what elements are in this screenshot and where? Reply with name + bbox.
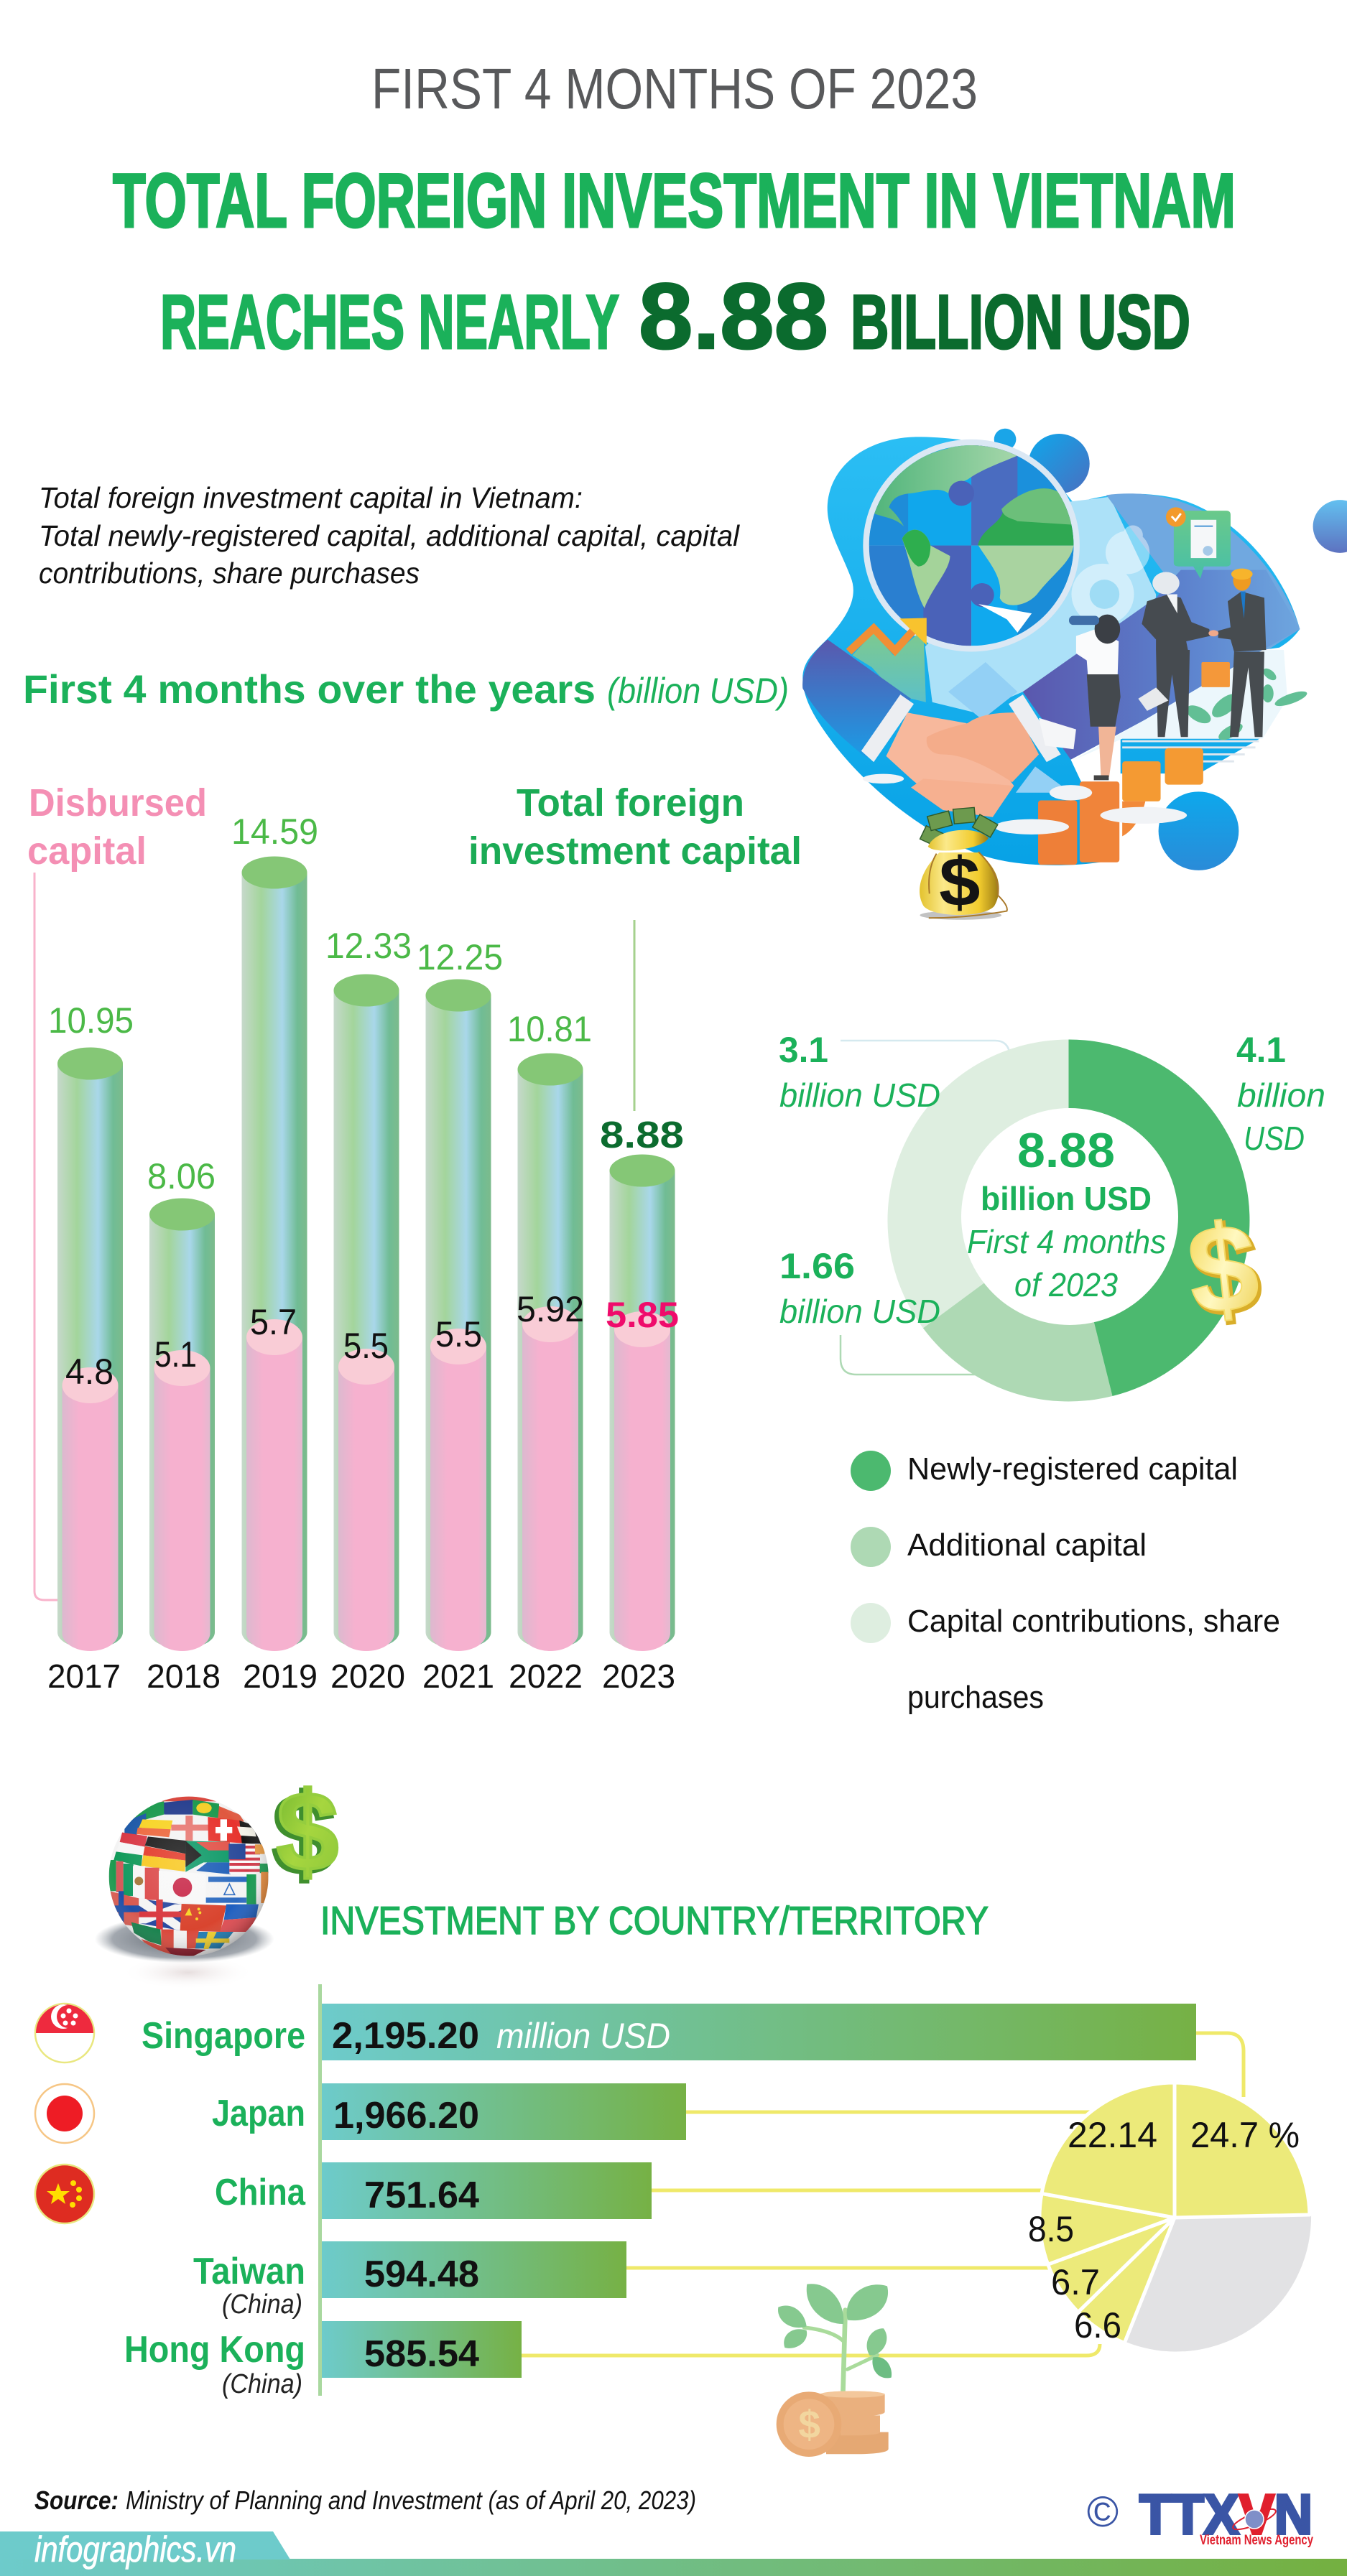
pie labels: 8.5 <box>1028 2209 1074 2249</box>
series label: total foreign investment capital: investment capital <box>468 829 802 873</box>
disbursed capital values: 5.5 <box>435 1314 482 1354</box>
label: 4.1 billion USD: 4.1 <box>1236 1030 1286 1070</box>
flag: Japan <box>35 2084 94 2143</box>
disbursed capital values: 4.8 <box>65 1352 114 1392</box>
year labels: 2021 <box>422 1657 494 1695</box>
country labels: Japan <box>212 2093 305 2134</box>
cylinder chart: total foreign investment vs disbursed capital <box>27 781 802 1695</box>
bar: Hong Kong: 585.54 <box>364 2333 479 2375</box>
flag: Singapore <box>35 2004 94 2063</box>
pie labels <box>1028 2115 1300 2345</box>
icon: gold dollar: $ <box>1182 1197 1264 1341</box>
year labels: 2023 <box>602 1657 675 1695</box>
donut centre text <box>967 1123 1166 1303</box>
plant leaves <box>1183 666 1309 743</box>
donut legend <box>851 1451 1280 1715</box>
section heading: investment by country: INVESTMENT BY COUNTRY/TERRITORY <box>320 1898 989 1943</box>
donut legend: Additional capital <box>907 1528 1147 1563</box>
donut legend: Capital contributions, share <box>907 1604 1280 1639</box>
bar: Singapore <box>322 2004 1196 2060</box>
bar chart: investment by country <box>124 1984 1196 2399</box>
year labels: 2020 <box>330 1657 405 1695</box>
businesswoman with binoculars <box>1069 615 1121 780</box>
donut centre text: billion USD <box>981 1180 1152 1217</box>
disbursed capital values: 5.5 <box>343 1326 389 1366</box>
country labels: (China) <box>222 2369 302 2399</box>
intro definition text <box>39 481 741 590</box>
source note: Ministry of Planning and Investment (as of April 20, 2023) <box>126 2486 696 2515</box>
donut legend: purchases <box>907 1680 1044 1715</box>
series label: disbursed capital: Disbursed <box>29 781 207 824</box>
total capital values: 12.33 <box>325 926 412 966</box>
bar: Japan <box>322 2083 686 2140</box>
intro definition text: Total newly-registered capital, additional capital, capital <box>39 519 741 552</box>
label: 4.1 billion USD: USD <box>1244 1120 1305 1157</box>
label: 4.1 billion USD: billion <box>1237 1077 1325 1114</box>
title: unit: BILLION USD <box>851 279 1190 365</box>
year labels: 2022 <box>509 1657 583 1695</box>
series label: disbursed capital <box>27 781 207 873</box>
leader line: disbursed capital <box>34 873 75 1600</box>
growth arrow chart <box>849 618 927 702</box>
pie labels: 6.7 <box>1051 2262 1100 2302</box>
businessmen shaking hands with briefcase <box>1138 569 1266 737</box>
orange bar steps <box>1038 741 1259 865</box>
connector lines from bars to pie <box>522 2033 1244 2356</box>
donut legend: Newly-registered capital <box>907 1451 1238 1487</box>
intro definition text: Total foreign investment capital in Vietnam: <box>39 481 583 514</box>
icon: gold dollar: $ <box>1184 1199 1267 1344</box>
pink cylinders <box>62 1306 670 1651</box>
country labels: Taiwan <box>193 2251 305 2292</box>
country labels <box>124 2015 306 2399</box>
TTXVN logo: Vietnam News Agency <box>1200 2533 1313 2548</box>
disbursed capital values: 5.92 <box>517 1289 584 1329</box>
handshake <box>802 640 1076 817</box>
series label: total foreign investment capital <box>468 781 802 873</box>
label: 1.66 billion USD: billion USD <box>779 1293 940 1330</box>
year labels: 2019 <box>243 1657 318 1695</box>
bar: Singapore: 2,195.20 <box>332 2015 479 2057</box>
series label: total foreign investment capital: Total foreign <box>517 781 744 824</box>
clouds <box>863 774 1092 834</box>
title: headline number: 8.88 <box>639 264 828 368</box>
axis <box>318 1984 322 2396</box>
label: 1.66 billion USD <box>779 1246 940 1330</box>
TTXVN logo: TTXVN <box>1139 2483 1313 2546</box>
series label: disbursed capital: capital <box>27 829 147 873</box>
intro definition text: contributions, share purchases <box>39 557 420 590</box>
label: 3.1 billion USD: billion USD <box>779 1077 940 1114</box>
chart heading: (billion USD) <box>607 671 789 711</box>
bar: Taiwan: 594.48 <box>364 2254 479 2295</box>
country labels: Hong Kong <box>124 2329 305 2371</box>
label: 3.1 billion USD: 3.1 <box>779 1030 828 1070</box>
total capital values: 10.95 <box>48 1000 134 1041</box>
footer band <box>0 2529 1347 2576</box>
year labels: 2017 <box>47 1657 121 1695</box>
total capital values: 14.59 <box>231 812 318 852</box>
bar: China <box>322 2162 652 2219</box>
donut centre text: of 2023 <box>1014 1266 1118 1303</box>
chart heading: First 4 months over the years <box>23 666 596 712</box>
title: main line 2: REACHES NEARLY <box>160 279 619 365</box>
pie: top five country shares <box>1040 2083 1310 2343</box>
segment: additional capital <box>923 1221 1112 1402</box>
donut chart: capital composition <box>779 1030 1325 1402</box>
disbursed capital values: 5.7 <box>250 1302 297 1342</box>
footer band: infographics.vn <box>34 2529 236 2570</box>
donut leader lines <box>841 1041 1010 1375</box>
pie labels: 6.6 <box>1074 2305 1121 2345</box>
country labels: China <box>215 2172 306 2213</box>
bar: Japan: 1,966.20 <box>333 2095 479 2136</box>
icon: sprout on coins <box>777 2284 892 2457</box>
TTXVN logo: © <box>1087 2488 1119 2536</box>
label: 4.1 billion USD <box>1236 1030 1325 1157</box>
green cylinders <box>57 856 675 1649</box>
donut centre text: 8.88 <box>1017 1123 1115 1178</box>
pie: remaining share <box>1126 2213 1311 2352</box>
pie labels: 22.14 <box>1068 2115 1157 2155</box>
money bag: $ <box>939 842 980 921</box>
country labels: (China) <box>222 2289 302 2320</box>
leader line: total capital <box>634 920 635 1111</box>
pie labels: 24.7 % <box>1190 2115 1300 2155</box>
icon: green dollar: $ <box>273 1772 335 1897</box>
document speech bubble <box>1166 507 1231 579</box>
icon: flag globe <box>95 1795 274 1989</box>
pie chart: share by country <box>1028 2083 1311 2352</box>
bar: China: 751.64 <box>364 2175 479 2216</box>
total capital values: 10.81 <box>507 1009 592 1049</box>
disbursed capital values <box>65 1289 679 1392</box>
money bag <box>920 807 1007 921</box>
bar: Hong Kong <box>322 2321 522 2378</box>
country labels: Singapore <box>142 2015 305 2057</box>
segment: newly-registered capital <box>1069 1040 1249 1396</box>
icon: green dollar: $ <box>277 1770 338 1894</box>
icon: sprout on coins: $ <box>798 2402 820 2447</box>
title block <box>113 57 1236 368</box>
globe <box>863 440 1080 651</box>
source note: Source: <box>34 2486 119 2515</box>
year labels <box>47 1657 675 1695</box>
bar: Singapore: million USD <box>496 2016 670 2056</box>
year labels: 2018 <box>147 1657 221 1695</box>
total capital values: 8.88 <box>600 1115 684 1156</box>
bar: Taiwan <box>322 2241 626 2298</box>
segment: capital contributions, share purchases <box>887 1040 1069 1328</box>
total capital values <box>48 812 684 1196</box>
title: period: FIRST 4 MONTHS OF 2023 <box>371 57 978 121</box>
disbursed capital values: 5.85 <box>606 1295 679 1335</box>
total capital values: 8.06 <box>147 1156 216 1196</box>
disbursed capital values: 5.1 <box>154 1334 197 1375</box>
label: 3.1 billion USD <box>779 1030 940 1114</box>
illustration: globe, handshake and business people <box>802 429 1347 921</box>
total capital values: 12.25 <box>417 937 503 977</box>
label: 1.66 billion USD: 1.66 <box>779 1246 855 1286</box>
decorative circles <box>994 429 1347 553</box>
flag: China <box>35 2165 94 2223</box>
donut centre text: First 4 months <box>967 1223 1166 1260</box>
